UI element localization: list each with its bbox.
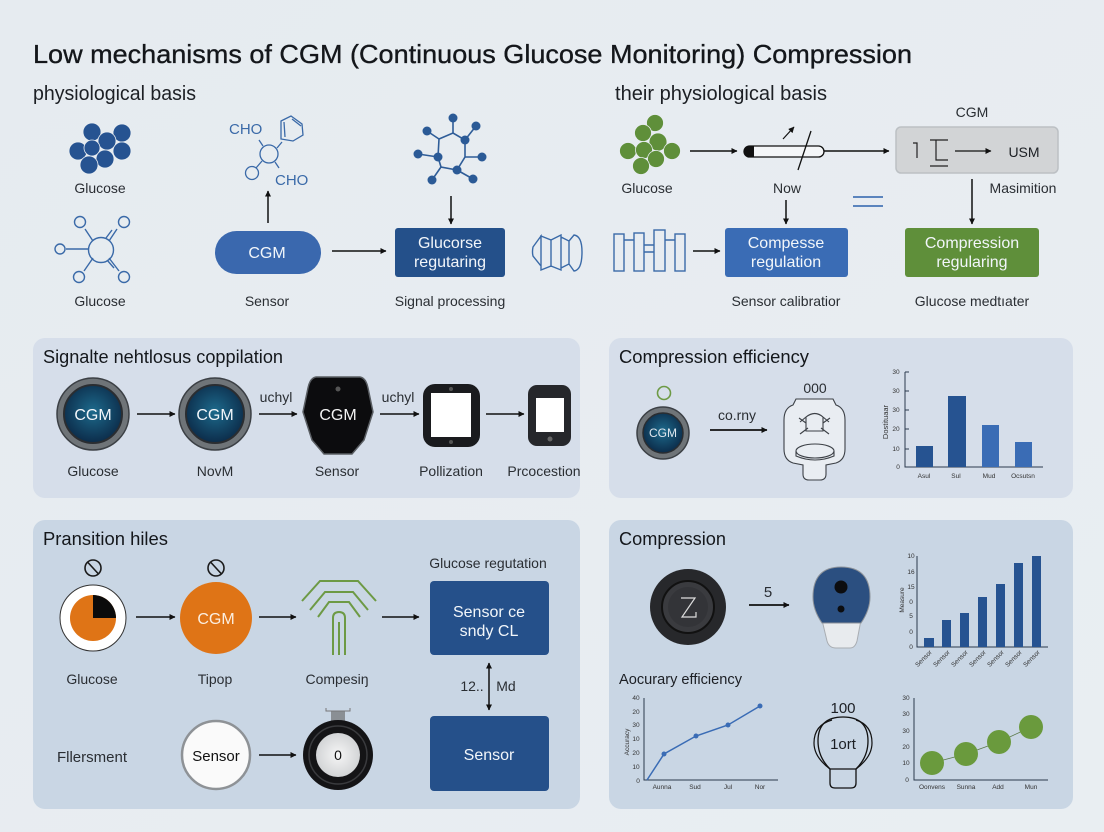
- labels: Glucose: [66, 671, 118, 687]
- icon: CGM dial: [637, 407, 689, 459]
- line chart: 10: [632, 764, 640, 771]
- icon: device square: [423, 384, 480, 447]
- icon: CGM dial: CGM: [649, 426, 677, 440]
- scatter chart: Oonvens: [919, 784, 946, 791]
- scatter chart: Mun: [1025, 784, 1038, 791]
- box: compression regularing: Compression: [925, 235, 1019, 252]
- labels: Glucose: [67, 463, 119, 479]
- scatter chart: Add: [992, 784, 1004, 791]
- label: glucose regulation: Glucose regutation: [429, 555, 547, 571]
- label: filersment: Fllersment: [57, 749, 128, 766]
- icon: signal antenna: [302, 581, 376, 655]
- arrow: [259, 616, 296, 618]
- icon: CGM sensor: CGM: [319, 407, 357, 424]
- label: sensor: Sensor: [245, 293, 290, 309]
- label: signal processing: Signal processing: [395, 293, 505, 309]
- icon: orange CGM: [180, 582, 252, 654]
- scatter chart: 0: [905, 777, 909, 784]
- line chart: 10: [632, 736, 640, 743]
- label: Md: Md: [496, 678, 516, 694]
- label: CGM: CGM: [956, 104, 988, 120]
- scatter chart: 30: [902, 728, 910, 735]
- labels: Prcocestion: [507, 463, 581, 479]
- arrow: [259, 413, 297, 415]
- icon: knob: [303, 708, 373, 790]
- heading: Signalte nehtlosus coppilation: [43, 347, 283, 367]
- label: uchyl: uchyl: [260, 389, 292, 405]
- label: glucose: Glucose: [74, 180, 126, 196]
- subtitle: left: physiological basis: [33, 83, 196, 105]
- scatter chart: [902, 695, 1048, 791]
- icon: chemical structure: CHO: [275, 172, 308, 189]
- icon: sensor circle: Sensor: [192, 748, 240, 765]
- scatter chart: 20: [902, 744, 910, 751]
- icon: device tall: [528, 385, 571, 446]
- box: grey USM: USM: [1008, 144, 1040, 160]
- icon: connected bars: [614, 230, 685, 271]
- bar chart: 30: [892, 407, 900, 414]
- bar chart: Sensor: [1022, 649, 1042, 669]
- label: 000: 000: [803, 380, 827, 396]
- icon: dark disc: [650, 569, 726, 645]
- box: sensor: Sensor: [464, 747, 515, 764]
- arrow: bars to box: [693, 250, 720, 252]
- bar chart: Sensor: [914, 649, 934, 669]
- box: glucose regutaring: Glucorse: [418, 235, 482, 252]
- label: now: Now: [773, 180, 802, 196]
- bar chart: Sensor: [950, 649, 970, 669]
- bar chart: Asul: [918, 473, 931, 480]
- icon: pie dial: [60, 585, 126, 651]
- labels: NovM: [197, 463, 233, 479]
- bar chart: 30: [892, 369, 900, 376]
- icon: molecule network: [414, 114, 486, 184]
- bar chart: Mud: [983, 473, 996, 480]
- icon: CGM dial 2: [179, 378, 251, 450]
- box: compesse regulation: [725, 228, 848, 277]
- arrow: [486, 413, 524, 415]
- heading: Compression: [619, 529, 726, 549]
- box: compesse regulation: Compesse: [748, 235, 824, 252]
- box: glucose regutaring: regutaring: [414, 254, 486, 271]
- line chart: 20: [632, 750, 640, 757]
- scatter chart: Sunna: [957, 784, 976, 791]
- bar chart: 20: [892, 426, 900, 433]
- bar chart: 0: [909, 599, 913, 606]
- bar chart: [881, 369, 1043, 480]
- icon: glucose cluster blue: [69, 123, 131, 174]
- scatter chart: 10: [902, 760, 910, 767]
- line chart: Sud: [689, 784, 701, 791]
- box: sensor ce: [430, 581, 549, 655]
- box: sensor: [430, 716, 549, 791]
- box: compression regularing: regularing: [936, 254, 1008, 271]
- label: uchyl: uchyl: [382, 389, 414, 405]
- arrow: network down: [450, 196, 452, 224]
- bar chart: Sensor: [968, 649, 988, 669]
- arrow: up to structure: [267, 191, 269, 223]
- line chart: 0: [636, 778, 640, 785]
- subtitle: right: their physiological basis: [615, 83, 827, 105]
- bar chart: Dostituaar: [881, 404, 890, 439]
- bar chart: 15: [907, 584, 915, 591]
- labels: [66, 671, 369, 687]
- bar chart: 0: [896, 464, 900, 471]
- icon: CGM dial 1: CGM: [74, 407, 112, 424]
- line chart: [624, 695, 778, 791]
- icon: funnel shapes: [532, 235, 582, 271]
- arrow: [380, 413, 419, 415]
- bar chart: Measure: [899, 587, 906, 613]
- bar chart: Sensor: [1004, 649, 1024, 669]
- panel: compression: [609, 520, 1073, 809]
- icon: knob: 0: [334, 747, 342, 763]
- arrow: [259, 754, 296, 756]
- labels: Tipop: [198, 671, 232, 687]
- CGM pill: CGM: [248, 245, 286, 262]
- label: masimition: Masimition: [990, 180, 1056, 196]
- box: sensor ce: Sensor ce: [453, 604, 525, 621]
- label: sensor calibration: Sensor calibratior: [732, 293, 841, 309]
- icon: chemical structure: [229, 116, 308, 189]
- bar chart: 16: [907, 569, 915, 576]
- scatter chart: 30: [902, 695, 910, 702]
- icon: glucose cluster green: [620, 114, 680, 174]
- icon: sensor tube: [744, 127, 824, 170]
- icon: chemical structure: CHO: [229, 121, 262, 138]
- line chart: 30: [632, 722, 640, 729]
- line chart: 20: [632, 709, 640, 716]
- bar chart: 5: [909, 613, 913, 620]
- box: compesse regulation: regulation: [751, 254, 821, 271]
- arrow: grey box down: [971, 179, 973, 224]
- labels: [67, 463, 581, 479]
- arrow: pill to box: [332, 250, 386, 252]
- bar chart: 0: [909, 644, 913, 651]
- icon: blue device: [813, 567, 870, 648]
- arrow: [382, 616, 419, 618]
- icon: bulb: 1ort: [830, 736, 857, 753]
- bar chart: 10: [892, 446, 900, 453]
- bar chart: Sensor: [932, 649, 952, 669]
- arrow: [137, 413, 175, 415]
- box: compression regularing: [905, 228, 1039, 277]
- icon: CGM dial 2: CGM: [196, 407, 234, 424]
- bar chart: [899, 553, 1048, 669]
- label: 12..: 12..: [460, 678, 484, 694]
- labels: Pollization: [419, 463, 483, 479]
- heading: accuracy: Aocurary efficiency: [619, 671, 742, 688]
- line chart: Accuracy: [624, 728, 631, 755]
- icon: no symbol: [208, 560, 224, 576]
- icon: sensor circle: [182, 721, 250, 789]
- arrow: [749, 604, 789, 606]
- arrow: tube to box: [824, 150, 889, 152]
- label: glucose: Glucose: [621, 180, 673, 196]
- arrow: double: [488, 663, 490, 710]
- bar chart: 30: [892, 388, 900, 395]
- labels: Sensor: [315, 463, 360, 479]
- icon: CGM dial 1: [57, 378, 129, 450]
- bar chart: Sul: [951, 473, 961, 480]
- icon: CGM sensor: [303, 377, 373, 454]
- box: glucose regutaring: [395, 228, 505, 277]
- box: grey USM: [896, 127, 1058, 173]
- box: sensor ce: sndy CL: [460, 623, 518, 640]
- line chart: 40: [632, 695, 640, 702]
- CGM pill: [215, 231, 321, 274]
- title: Low mechanisms of CGM (Continuous Glucose Monitoring) Compression: [33, 39, 912, 69]
- bar chart: Ocsutsn: [1011, 473, 1035, 480]
- icon: bulb: 100: [830, 700, 856, 717]
- line chart: Nor: [755, 784, 766, 791]
- icon: bulb: [814, 700, 872, 788]
- label: 5: 5: [764, 584, 772, 601]
- heading: Compression efficiency: [619, 347, 809, 367]
- bar chart: 10: [907, 553, 915, 560]
- icon: glucose molecule outline: [55, 216, 130, 282]
- arrow: [136, 616, 175, 618]
- icon: equals sign: [853, 197, 883, 206]
- label: glucose: Glucose: [74, 293, 126, 309]
- arrow: now down: [785, 200, 787, 224]
- icon: green dial: [658, 386, 670, 400]
- panel: transition: [33, 520, 580, 809]
- icon: device outline: [784, 399, 845, 480]
- line chart: Aunna: [653, 784, 672, 791]
- arrow: [710, 429, 767, 431]
- panel: compression efficiency: [609, 338, 1073, 498]
- panel: signal compilation: [33, 338, 581, 498]
- bar chart: 0: [909, 629, 913, 636]
- label: co.my: co.rny: [718, 407, 756, 423]
- icon: orange CGM: CGM: [197, 611, 235, 628]
- heading: Pransition hiles: [43, 529, 168, 549]
- arrow: cluster to tube: [690, 150, 737, 152]
- label: glucose mediator: Glucose medtıater: [915, 293, 1030, 309]
- scatter chart: 30: [902, 711, 910, 718]
- labels: Compesiŋ: [305, 671, 369, 687]
- bar chart: Sensor: [986, 649, 1006, 669]
- icon: no symbol: [85, 560, 101, 576]
- line chart: Jul: [724, 784, 733, 791]
